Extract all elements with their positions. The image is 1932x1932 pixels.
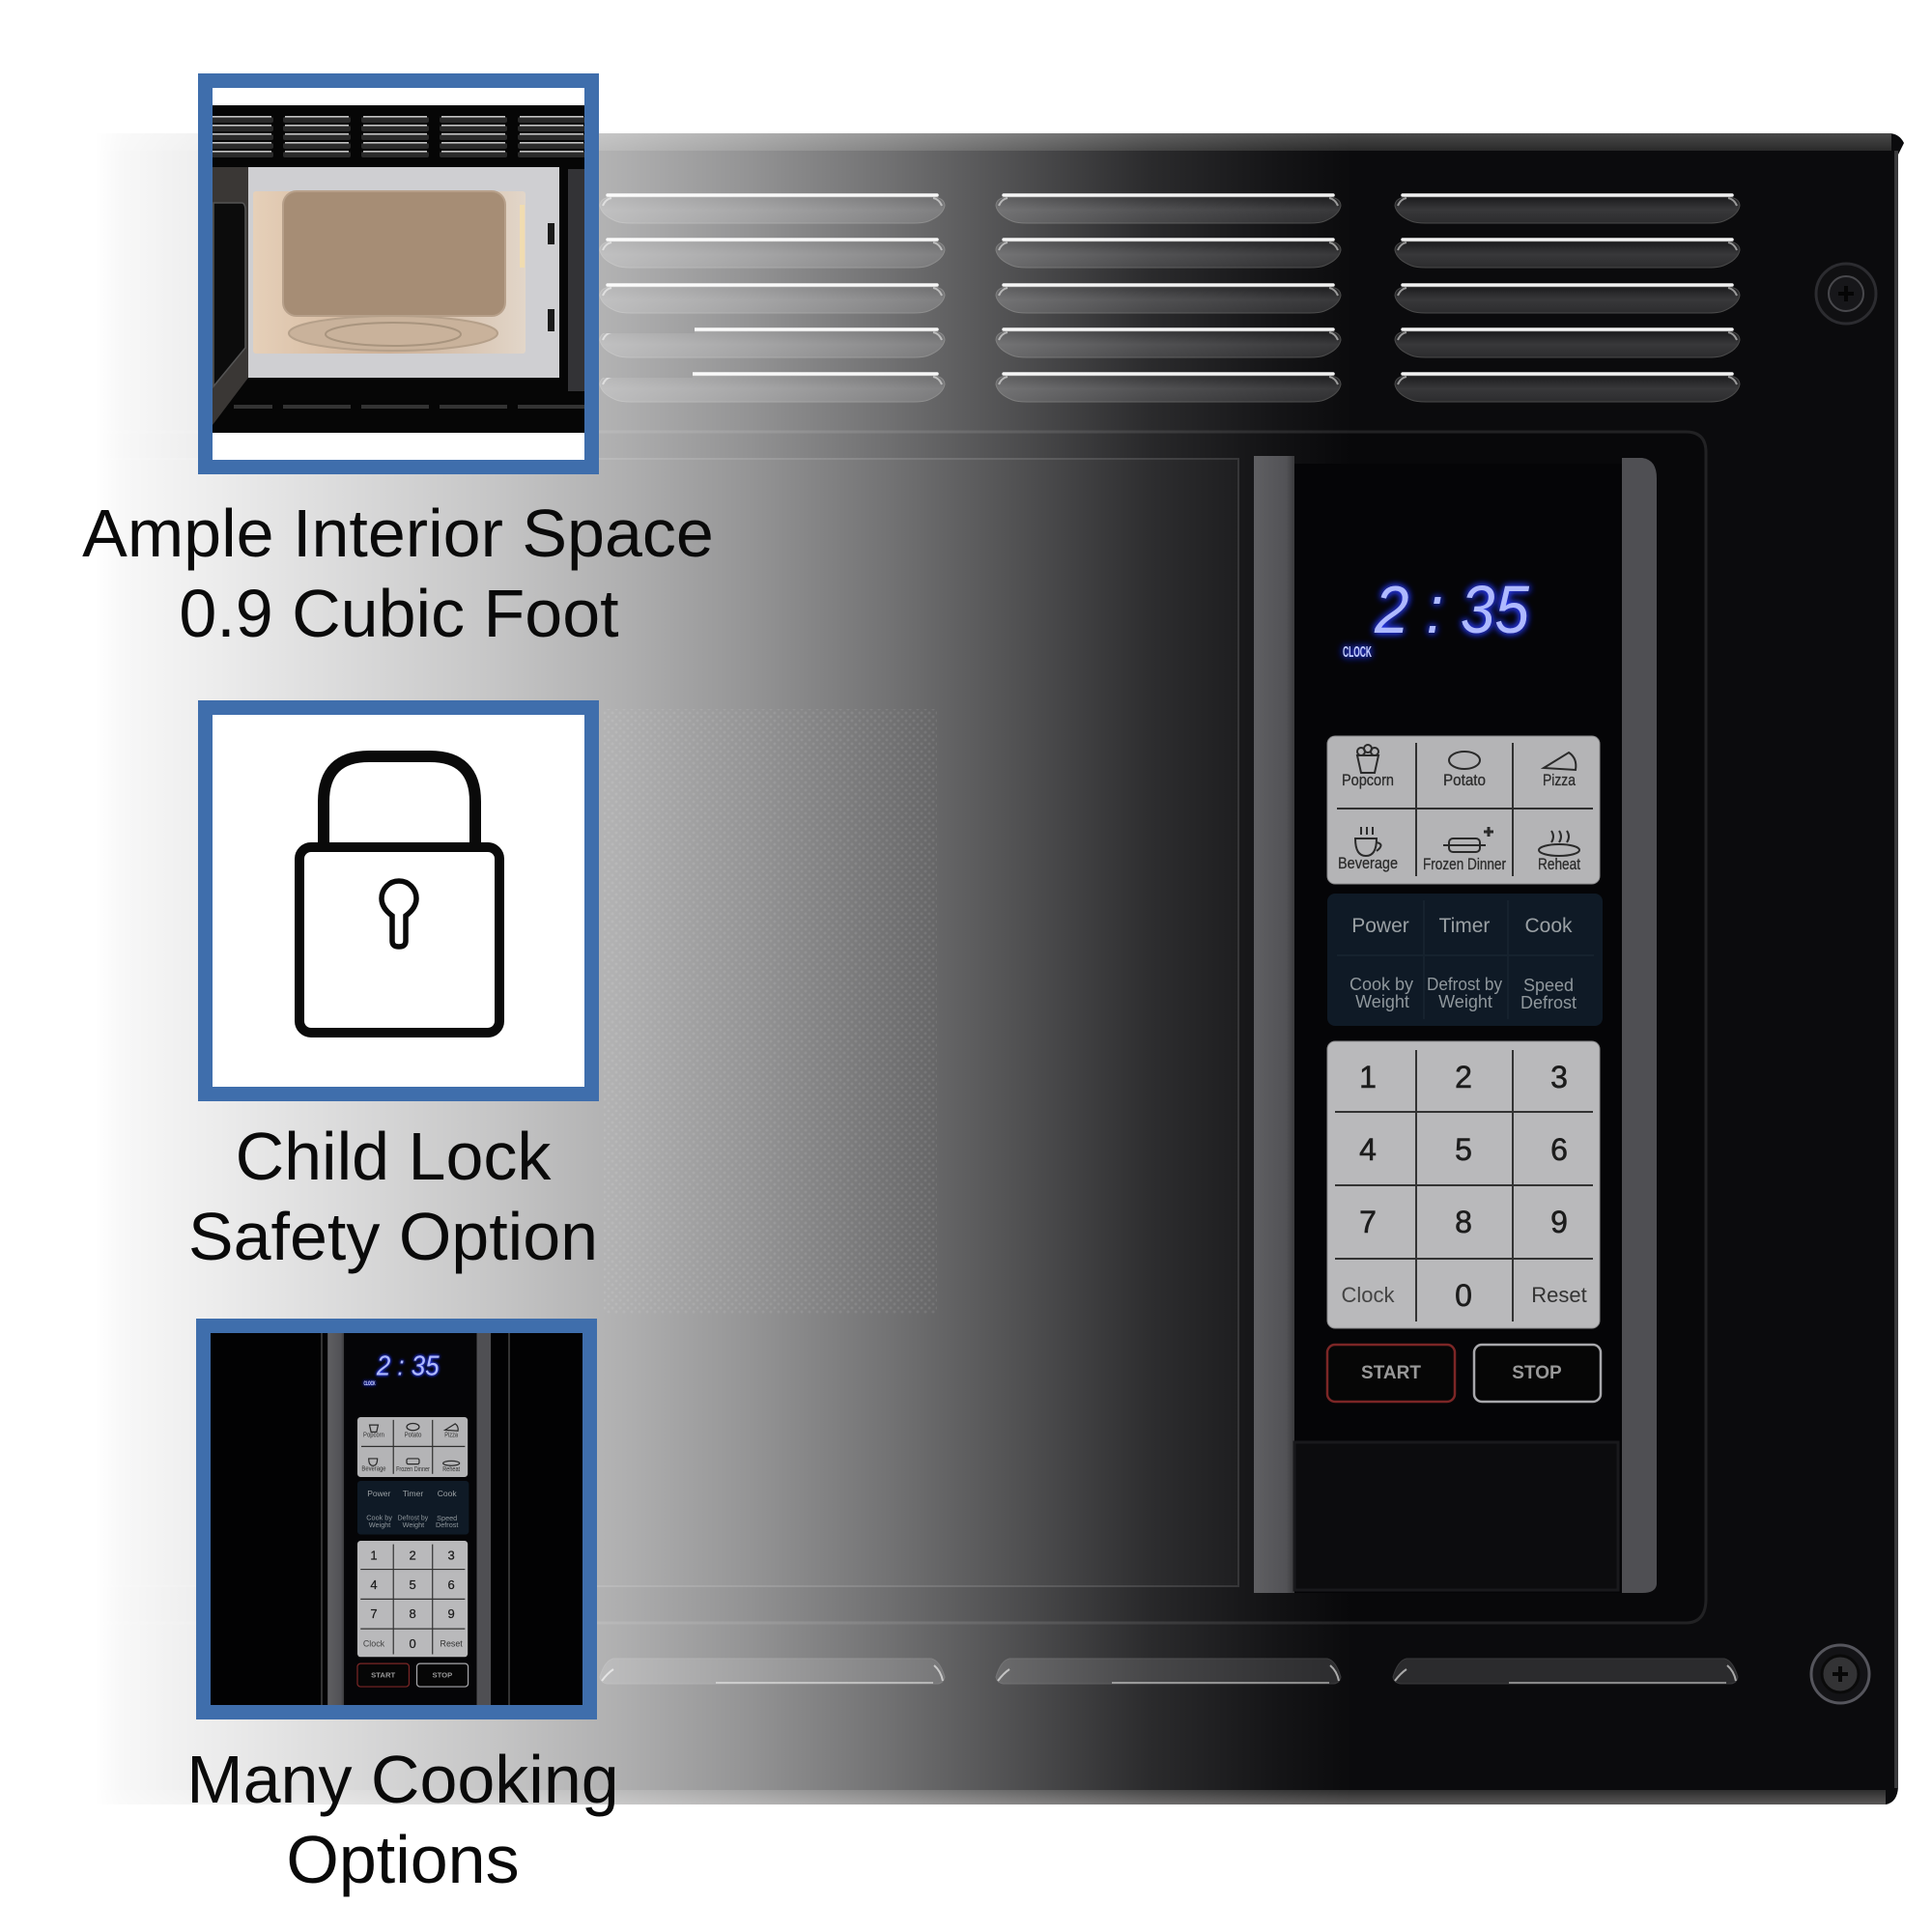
function keys panel: Speed [1523, 976, 1574, 995]
feature 1 caption [82, 496, 714, 651]
number keypad: 3 [1550, 1060, 1568, 1094]
control panel [1254, 456, 1657, 1593]
control panel close-up: START [371, 1670, 396, 1679]
number keypad: 0 [1455, 1278, 1472, 1313]
keypad labels: Potato [1443, 771, 1486, 789]
thumbnail vents [206, 116, 585, 157]
clock display [1343, 572, 1530, 661]
oven door latch slots [548, 223, 554, 331]
control panel close-up: Weight [403, 1520, 424, 1529]
icon: pizza [1544, 753, 1576, 770]
screw top [1816, 264, 1876, 324]
control panel close-up [322, 1304, 509, 1764]
control panel close-up: 2 [409, 1548, 416, 1562]
control panel close-up: 2 : 35 [376, 1351, 440, 1382]
function keys panel: Defrost by [1427, 975, 1502, 994]
control panel close-up: Frozen Dinner [396, 1466, 430, 1473]
oven cavity [253, 191, 526, 354]
stop button [1474, 1345, 1601, 1402]
function keys panel: Power [1351, 915, 1409, 937]
panel right trim [1622, 458, 1657, 1593]
keypad labels [1338, 771, 1580, 873]
right panel strip [568, 169, 584, 391]
control panel close-up: Weight [369, 1520, 390, 1529]
top vents [600, 195, 1740, 402]
control panel close-up: Pizza [444, 1433, 458, 1439]
function keys panel: Weight [1438, 992, 1492, 1011]
control panel close-up: STOP [432, 1670, 452, 1679]
control panel close-up: 4 [370, 1577, 378, 1592]
oven cavity frame [248, 167, 559, 378]
number keypad: 7 [1359, 1205, 1377, 1239]
function keys panel [1327, 894, 1603, 1026]
oven back wall [283, 191, 505, 316]
control panel close-up: 9 [448, 1606, 455, 1621]
control panel close-up: 1 [370, 1548, 378, 1562]
icon: padlock [299, 756, 499, 1033]
feature 3 caption: Options [286, 1822, 520, 1897]
control panel close-up: Defrost [436, 1520, 458, 1529]
clock display: CLOCK [1343, 644, 1372, 661]
control panel close-up: Cook [438, 1489, 457, 1498]
turntable [289, 316, 497, 351]
function keys panel: Defrost [1520, 993, 1577, 1012]
number keypad: 4 [1359, 1132, 1377, 1167]
clock display: 2 : 35 [1374, 572, 1530, 647]
top edge band [97, 133, 1891, 151]
start button: START [1361, 1363, 1421, 1383]
control panel close-up: Clock [363, 1638, 385, 1648]
icon: potato [1449, 752, 1480, 769]
control panel close-up: Timer [403, 1489, 423, 1498]
number keypad: 2 [1455, 1060, 1472, 1094]
feature 2 caption: Safety Option [188, 1199, 598, 1274]
control panel close-up: Defrost by [398, 1514, 429, 1522]
open door [213, 167, 248, 425]
control panel close-up: Speed [437, 1514, 457, 1522]
control panel close-up: 3 [448, 1548, 455, 1562]
panel lower section [1294, 1442, 1618, 1590]
icon: popcorn [1357, 745, 1378, 773]
feature 2 caption: Child Lock [236, 1119, 552, 1194]
number keypad: 5 [1455, 1132, 1472, 1167]
keypad labels: Beverage [1338, 854, 1398, 872]
control panel close-up: 6 [448, 1577, 455, 1592]
function keys panel: Weight [1355, 992, 1409, 1011]
stop button: STOP [1512, 1363, 1562, 1383]
control panel close-up: 7 [370, 1606, 378, 1621]
oven interior photo [206, 105, 585, 433]
control panel close-up: Reset [440, 1638, 463, 1648]
icon: reheat [1539, 831, 1579, 856]
function keys panel: Cook by [1350, 975, 1413, 994]
door window mesh [604, 709, 937, 1314]
number keypad: 8 [1455, 1205, 1472, 1239]
function keys panel: Cook [1524, 915, 1573, 937]
control panel close-up: Popcorn [363, 1433, 384, 1439]
keypad labels: Reheat [1538, 855, 1580, 873]
door recess outline [97, 432, 1706, 1623]
number keypad: 6 [1550, 1132, 1568, 1167]
fade overlay [95, 126, 1352, 1811]
control panel close-up: 5 [409, 1577, 416, 1592]
feature 3 caption [186, 1742, 619, 1897]
number keypad: Reset [1531, 1283, 1587, 1307]
control panel close-up: 0 [409, 1636, 416, 1651]
auto cook keypad [1327, 736, 1600, 884]
bottom edge band [97, 1790, 1886, 1804]
number keypad: 1 [1359, 1060, 1377, 1094]
door window [97, 459, 1238, 1586]
keypad labels: Popcorn [1342, 771, 1394, 789]
number keypad: Clock [1341, 1283, 1396, 1307]
panel left trim [1254, 456, 1294, 1593]
control panel close-up: Reheat [442, 1466, 460, 1473]
control panel close-up: CLOCK [363, 1380, 376, 1387]
oven side light [520, 205, 525, 268]
number keypad: 9 [1550, 1205, 1568, 1239]
control panel close-up: Potato [405, 1433, 422, 1439]
start button [1327, 1345, 1455, 1402]
control panel close-up: Power [367, 1489, 390, 1498]
bottom thumbnail vents [234, 405, 584, 409]
feature 3 image frame [196, 1319, 597, 1719]
icon: frozen dinner [1443, 827, 1493, 852]
number keypad [1327, 1041, 1600, 1328]
door window [213, 203, 245, 386]
feature 2 image frame [198, 700, 599, 1101]
screw bottom [1811, 1645, 1869, 1703]
control panel close-up: 8 [409, 1606, 416, 1621]
bottom vents [600, 1659, 1738, 1684]
keypad labels: Pizza [1543, 771, 1576, 789]
feature 1 caption: 0.9 Cubic Foot [179, 576, 619, 651]
icon: beverage [1355, 827, 1381, 856]
panel black face [1294, 464, 1622, 1593]
keypad labels: Frozen Dinner [1423, 855, 1506, 873]
control panel close-up: Beverage [361, 1465, 386, 1472]
feature 3 caption: Many Cooking [186, 1742, 619, 1817]
feature 1 caption: Ample Interior Space [82, 496, 714, 571]
function keys panel: Timer [1439, 915, 1490, 937]
right edge strip [1894, 151, 1898, 1788]
feature 2 caption [188, 1119, 598, 1274]
control panel close-up: Cook by [366, 1514, 392, 1522]
feature 1 image frame [198, 73, 599, 474]
